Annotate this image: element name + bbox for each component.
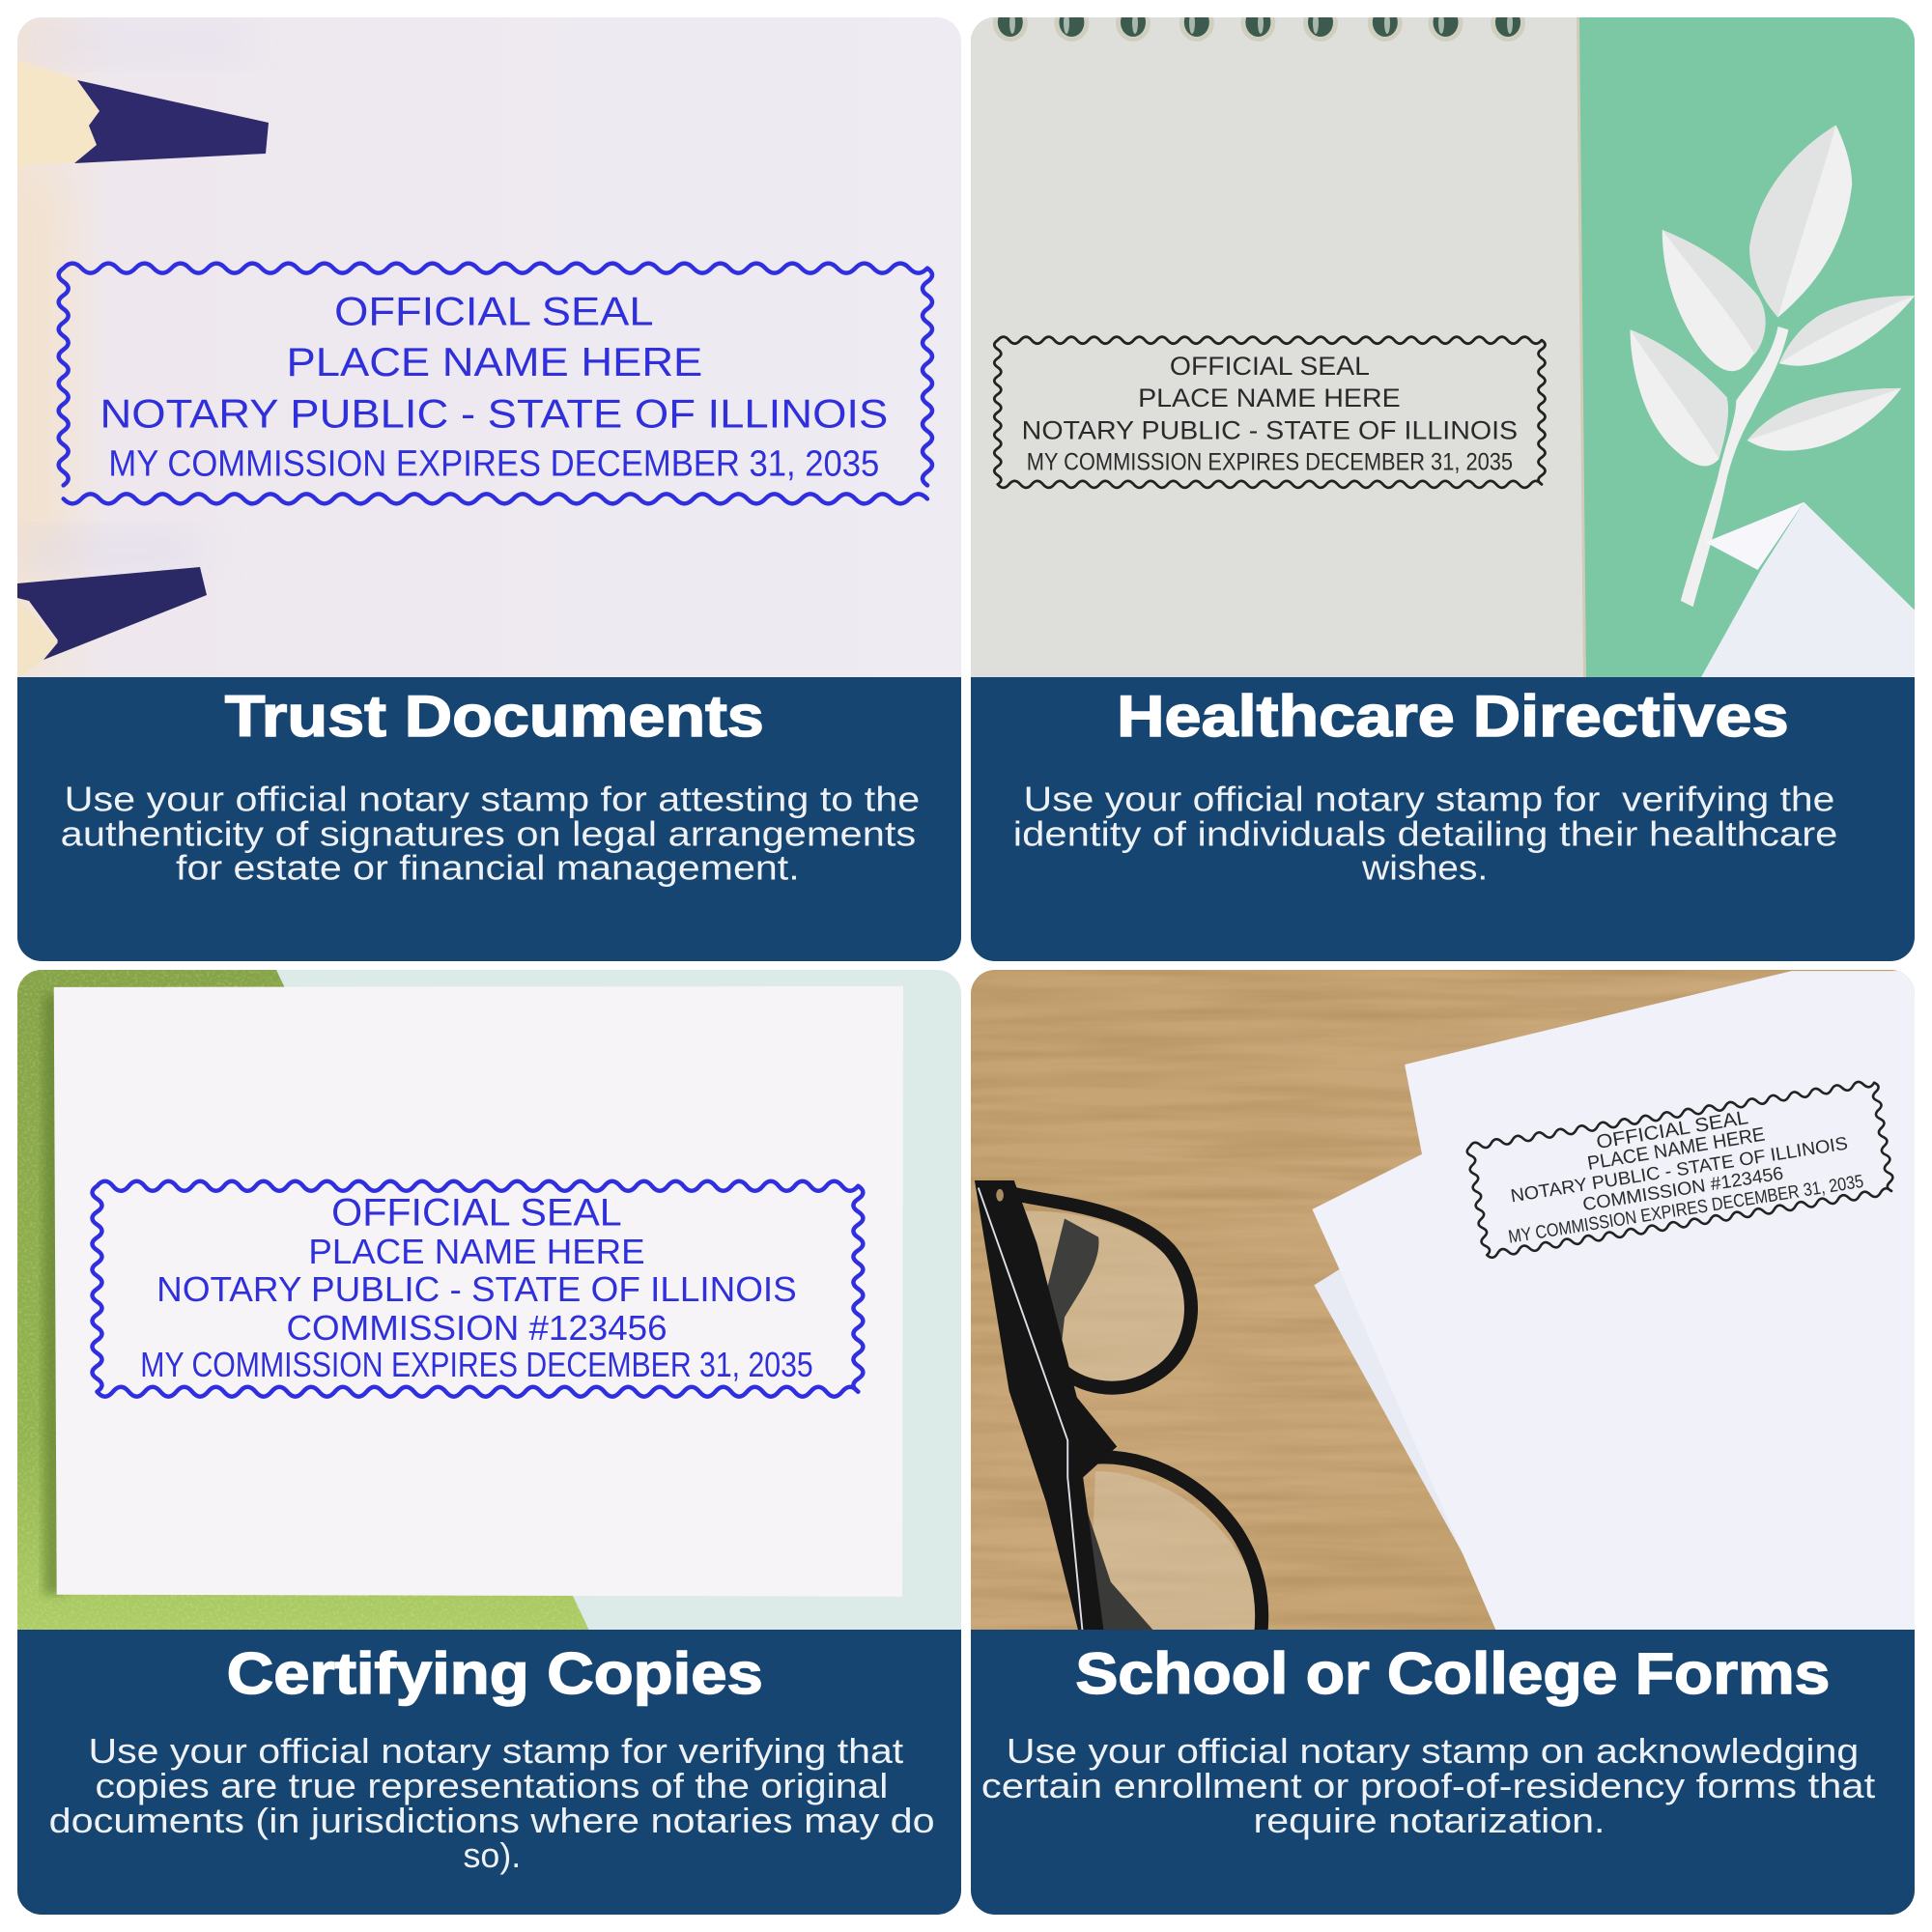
stamp: blue notary seal with commission number (93, 1181, 863, 1397)
stamp text: MY COMMISSION EXPIRES DECEMBER 31, 2035 (1027, 448, 1513, 475)
icon: paper envelope (1699, 502, 1927, 681)
glasses hinge hole (996, 1189, 1004, 1202)
stamp text: OFFICIAL SEAL (1170, 352, 1370, 381)
body text (61, 780, 920, 887)
stamp text: PLACE NAME HERE (286, 339, 702, 384)
stamp text: PLACE NAME HERE (308, 1232, 645, 1271)
body text: authenticity of signatures on legal arrangements (61, 813, 916, 854)
stamp text: PLACE NAME HERE (1138, 384, 1401, 412)
heading: Certifying Copies (227, 1641, 763, 1706)
stamp text: OFFICIAL SEAL (331, 1192, 622, 1235)
body text (981, 1731, 1875, 1840)
glasses upper frame (994, 1189, 1191, 1388)
stamp wavy border (1466, 1079, 1895, 1259)
shadow under white card (43, 995, 67, 1594)
body text: copies are true representations of the original (95, 1766, 888, 1805)
photo: white card (54, 986, 903, 1597)
icon: spiral binding holes (993, 17, 1525, 42)
photo: paper background (17, 17, 961, 678)
caption band (17, 1630, 961, 1915)
caption band (971, 1630, 1915, 1915)
heading: School or College Forms (1075, 1641, 1830, 1706)
photo: wooden desk (971, 970, 1915, 1631)
stamp text: NOTARY PUBLIC - STATE OF ILLINOIS (1022, 416, 1518, 445)
stamp text: PLACE NAME HERE (1586, 1123, 1767, 1175)
stamp text: MY COMMISSION EXPIRES DECEMBER 31, 2035 (108, 444, 879, 485)
stamp wavy border (994, 337, 1546, 488)
icon: upper pencil (17, 60, 269, 166)
body text: Use your official notary stamp on acknowledging (1007, 1731, 1859, 1771)
body text (49, 1731, 935, 1875)
shadow: upper pencil (17, 29, 249, 58)
stamp text (140, 1192, 813, 1384)
stamp text: NOTARY PUBLIC - STATE OF ILLINOIS (1509, 1133, 1849, 1207)
stamp text (1022, 352, 1518, 475)
panel: trust documents (0, 17, 961, 961)
green card weave texture (17, 970, 597, 1631)
body text (1016, 786, 1836, 880)
photo: pale textured background (17, 970, 961, 1631)
stamp text: OFFICIAL SEAL (334, 288, 653, 333)
notebook page edge (1577, 17, 1586, 678)
body text: certain enrollment or proof-of-residency forms that (981, 1766, 1875, 1805)
panel: certifying copies (17, 970, 961, 1915)
body text: for estate or financial management. (176, 847, 800, 887)
stamp text: MY COMMISSION EXPIRES DECEMBER 31, 2035 (140, 1345, 813, 1384)
wood grain (971, 970, 1915, 1631)
photo: stacked white papers (1312, 971, 1927, 1634)
glasses inner arm (1043, 1218, 1098, 1373)
photo: green card (17, 970, 589, 1631)
stamp text: OFFICIAL SEAL (1595, 1107, 1749, 1153)
stamp: blue notary seal (59, 264, 932, 503)
body text: Use your official notary stamp for verifying the (1024, 780, 1834, 819)
photo: green background (971, 17, 1915, 678)
body text: identity of individuals detailing their healthcare (1013, 813, 1837, 854)
caption band (17, 677, 961, 961)
stamp: black notary seal (994, 337, 1546, 488)
stamp wavy border (59, 264, 932, 503)
glasses lenses (1003, 1211, 1188, 1388)
icon: lower pencil (17, 567, 207, 678)
heading: Trust Documents (225, 684, 764, 749)
stamp text (100, 288, 888, 485)
stamp text: NOTARY PUBLIC - STATE OF ILLINOIS (100, 391, 888, 437)
leaf fold shading (1631, 125, 1915, 459)
body text: Use your official notary stamp for verifying that (89, 1731, 903, 1771)
stamp text: COMMISSION #123456 (286, 1308, 667, 1348)
body text: require notarization. (1254, 1801, 1605, 1840)
stamp text: MY COMMISSION EXPIRES DECEMBER 31, 2035 (1507, 1172, 1865, 1248)
heading: Healthcare Directives (1117, 684, 1789, 749)
body text: Use your official notary stamp for attesting to the (65, 780, 920, 819)
stamp text: NOTARY PUBLIC - STATE OF ILLINOIS (156, 1269, 797, 1309)
warm reflection beside pencils (21, 185, 68, 537)
icon: paper leaf branch (1631, 125, 1915, 607)
stamp wavy border (93, 1181, 863, 1397)
stamp text: COMMISSION #123456 (1581, 1164, 1785, 1215)
body text: so). (464, 1835, 521, 1875)
caption band (971, 677, 1915, 961)
photo: notebook page (971, 17, 1585, 678)
body text: documents (in jurisdictions where notaries may do (49, 1801, 935, 1840)
stamp text (1507, 1107, 1865, 1248)
glasses lower frame (1083, 1457, 1262, 1637)
body text: wishes. (1361, 847, 1488, 887)
glasses temple (975, 1180, 1117, 1637)
icon: black glasses (975, 1180, 1262, 1637)
shadow: lower pencil (17, 536, 201, 565)
stamp: rotated black notary seal (1466, 1079, 1895, 1259)
panel: school or college forms (971, 970, 1927, 1915)
panel: healthcare directives (971, 5, 1927, 961)
